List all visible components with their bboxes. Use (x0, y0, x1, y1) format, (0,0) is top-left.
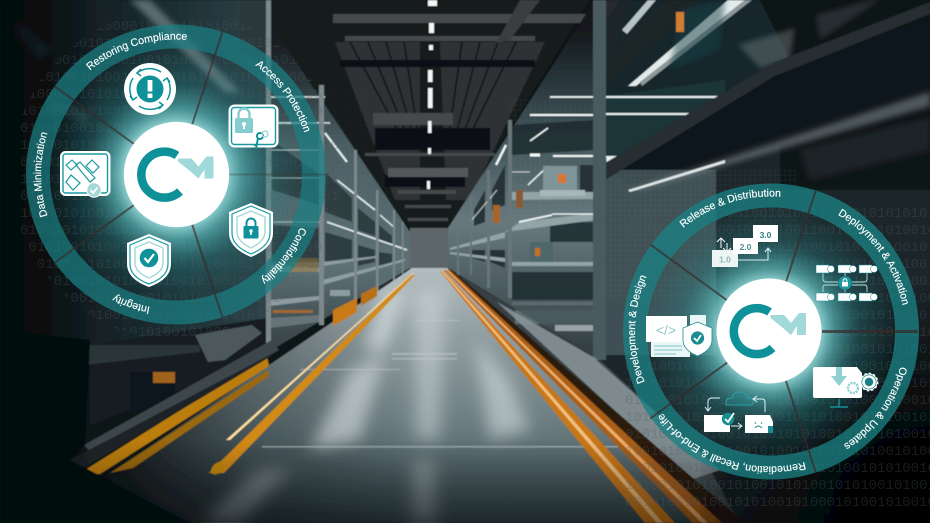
label: Deployment & Activation: Deployment & Activation (838, 208, 908, 305)
ceiling (270, 0, 590, 228)
binary pattern left: 1010100100101010010101001010010101001010 (20, 172, 356, 188)
binary pattern left: 1010100101001010010100101001010100101010 (20, 240, 356, 256)
label: Development & Design: Development & Design (628, 275, 646, 384)
icon: access protection lock (228, 104, 278, 149)
icon: integrity shield (127, 234, 171, 287)
right wheel glow (646, 208, 894, 456)
binary pattern left: 0100010101010010100101010010100101001010 (20, 87, 356, 103)
label: Remediation, Recall & End-of-Life: Remediation, Recall & End-of-Life (658, 414, 806, 474)
left wheel ring (38, 36, 314, 312)
label: Access Protection: Access Protection (255, 61, 310, 132)
label: Confidentiality: Confidentiality (262, 228, 306, 284)
icon: restoring compliance (124, 63, 176, 115)
icon: deployment network (816, 265, 878, 301)
right shelves (448, 0, 600, 360)
right side floor (497, 302, 720, 480)
binary pattern left (20, 19, 356, 341)
icon: version release boxes (712, 225, 778, 267)
panel: left security wheel (26, 24, 326, 324)
binary pattern left: 0010100101001010100101000101001010010100 (20, 325, 356, 341)
icon: version release boxes: 3.0 (760, 230, 772, 240)
binary pattern left: 0101001010100100101001100101001010010101 (20, 53, 356, 69)
binary pattern left: 0101001010100101001010100101001010010101 (20, 257, 356, 273)
right logo disc (716, 278, 822, 384)
panel: right lifecycle wheel (623, 184, 919, 480)
floor (100, 268, 740, 523)
binary pattern left: 1010010101001010101000101001010101001010 (20, 104, 356, 120)
binary pattern left: 0101010010101001001010100101001010100101 (20, 121, 356, 137)
binary pattern left: 1010100101001010100101001010100100101010 (20, 70, 356, 86)
edge vignettes (0, 0, 90, 523)
label: Release & Distribution: Release & Distribution (679, 188, 780, 228)
right dark top zone (600, 0, 930, 523)
icon: remediation cloud and calendar (704, 392, 773, 433)
right foreground glass frame (593, 0, 930, 360)
binary pattern left: 0101000101000010100101010010100010101001 (20, 19, 356, 35)
label: Integrity: Integrity (112, 294, 150, 314)
left conveyor rail (84, 340, 279, 452)
icon: data minimization (60, 151, 110, 197)
icon: confidentiality shield (229, 203, 273, 257)
label: Restoring Compliance: Restoring Compliance (86, 32, 187, 70)
end wall (410, 228, 448, 270)
icon: development code window with shield: </> (656, 322, 676, 338)
label: Operation & Updates: Operation & Updates (844, 368, 907, 449)
binary pattern left: 1010010100101010010100101001010010101001 (20, 206, 356, 222)
label: Data Minimization: Data Minimization (33, 132, 48, 218)
right wheel spokes (650, 191, 918, 472)
left logo disc (124, 122, 229, 227)
left dark shelf zone (12, 0, 272, 425)
left wheel spokes (55, 32, 326, 317)
icon: version release boxes: 2.0 (740, 242, 752, 252)
binary pattern left: 0100101010010100101001010010101001010100 (20, 155, 356, 171)
right wheel ring (635, 196, 907, 468)
binary pattern left: 1010010101001010010101001010100101001010 (20, 308, 356, 324)
left wheel glow (50, 48, 302, 300)
binary pattern left: 1001010010101001010010100101010010100101 (20, 274, 356, 290)
binary pattern right (625, 206, 930, 511)
binary pattern left: 0101001010010101001010010101001010100101 (20, 189, 356, 205)
icon: version release boxes: 1.0 (719, 254, 731, 264)
binary pattern left: 0100101010010100101010010101001010010100 (20, 223, 356, 239)
orange floor strips (64, 270, 745, 523)
binary pattern left: 1010010100101001010100101010010100101001 (20, 138, 356, 154)
icon: operation monitor with gears (813, 367, 878, 407)
icon: development code window with shield (646, 315, 712, 357)
left shelves (268, 20, 410, 352)
binary pattern left: 1001010010100010010100110100101010101001 (20, 36, 356, 52)
binary pattern left: 0101010010100100101010010100101010010100 (20, 291, 356, 307)
